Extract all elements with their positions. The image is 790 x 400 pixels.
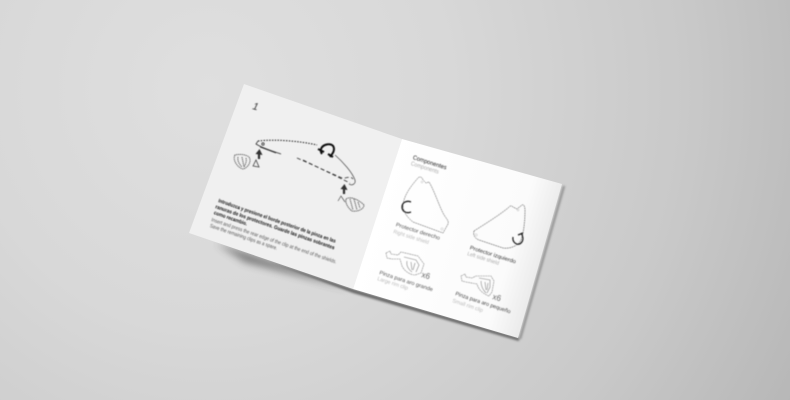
instructions spanish: ranuras de los protectores. Guarde las pinzas sobrantes (214, 204, 335, 251)
small clip (461, 274, 494, 296)
right up arrow (343, 188, 345, 194)
left small piece (253, 160, 259, 167)
left page (189, 84, 402, 289)
step number: 1 (251, 101, 259, 113)
instructions english: Save the remaining clips as a spare. (209, 223, 278, 252)
label small clip: Small rim clip (451, 298, 484, 314)
label left shield: Protector izquierdo (469, 245, 516, 265)
label large clip: Pinza para aro grande (378, 270, 433, 293)
label left shield: Left side shield (466, 251, 500, 267)
label small clip: Pinza para aro pequeño (454, 291, 511, 315)
components heading: Components (410, 161, 439, 176)
right clip (346, 198, 364, 211)
shield outline (258, 140, 317, 145)
right page (353, 139, 562, 338)
booklet shadow (216, 186, 565, 341)
right small piece (338, 196, 345, 202)
rotate arrow (318, 144, 334, 157)
label right shield: Protector derecho (395, 222, 441, 242)
label large clip: Large rim clip (376, 276, 409, 292)
components heading: Componentes (412, 155, 447, 171)
instructions spanish: Introduzca y presione el borde posterior de la pinza en las (217, 198, 337, 245)
large clip (386, 251, 424, 275)
x6 small: x6 (491, 292, 503, 304)
left side shield (474, 205, 525, 248)
instructions spanish: como recambio. (213, 210, 248, 228)
assembly illustration (234, 140, 364, 211)
left up arrow (258, 153, 260, 159)
x6 large: x6 (420, 270, 432, 282)
label right shield: Right side shield (392, 229, 429, 246)
instructions english: Insert and press the rear edge of the clip at the end of the shields. (210, 217, 337, 265)
left clip (234, 154, 250, 169)
right side shield (402, 177, 448, 233)
label right shield (392, 222, 441, 246)
